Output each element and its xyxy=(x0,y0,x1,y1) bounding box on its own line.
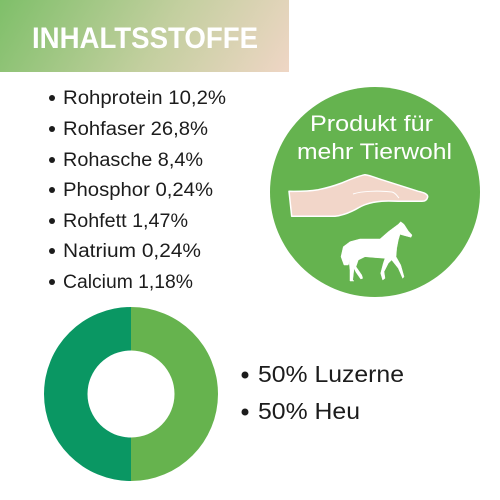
ingredient list: Rohfett 1,47% xyxy=(63,211,188,232)
ingredient list: Calcium 1,18% xyxy=(63,272,193,293)
ingredient list: Rohprotein 10,2% xyxy=(63,88,226,109)
title banner: INHALTSSTOFFE xyxy=(32,22,258,55)
donut legend: 50% Heu xyxy=(258,398,360,424)
ingredient list xyxy=(49,88,226,293)
title banner xyxy=(0,0,289,72)
badge text: mehr Tierwohl xyxy=(297,139,452,164)
badge text: Produkt für xyxy=(310,111,433,136)
icon: hand xyxy=(289,175,428,216)
donut chart xyxy=(44,307,218,481)
badge text xyxy=(297,111,452,164)
ingredient list: Phosphor 0,24% xyxy=(63,180,213,201)
ingredient list: Rohfaser 26,8% xyxy=(63,119,208,140)
ingredient list: Natrium 0,24% xyxy=(63,241,201,262)
ingredient list: Rohasche 8,4% xyxy=(63,150,203,171)
icon: horse xyxy=(341,222,412,281)
badge: Produkt für mehr Tierwohl xyxy=(270,87,480,297)
donut legend: 50% Luzerne xyxy=(258,361,404,387)
donut legend xyxy=(242,361,404,424)
